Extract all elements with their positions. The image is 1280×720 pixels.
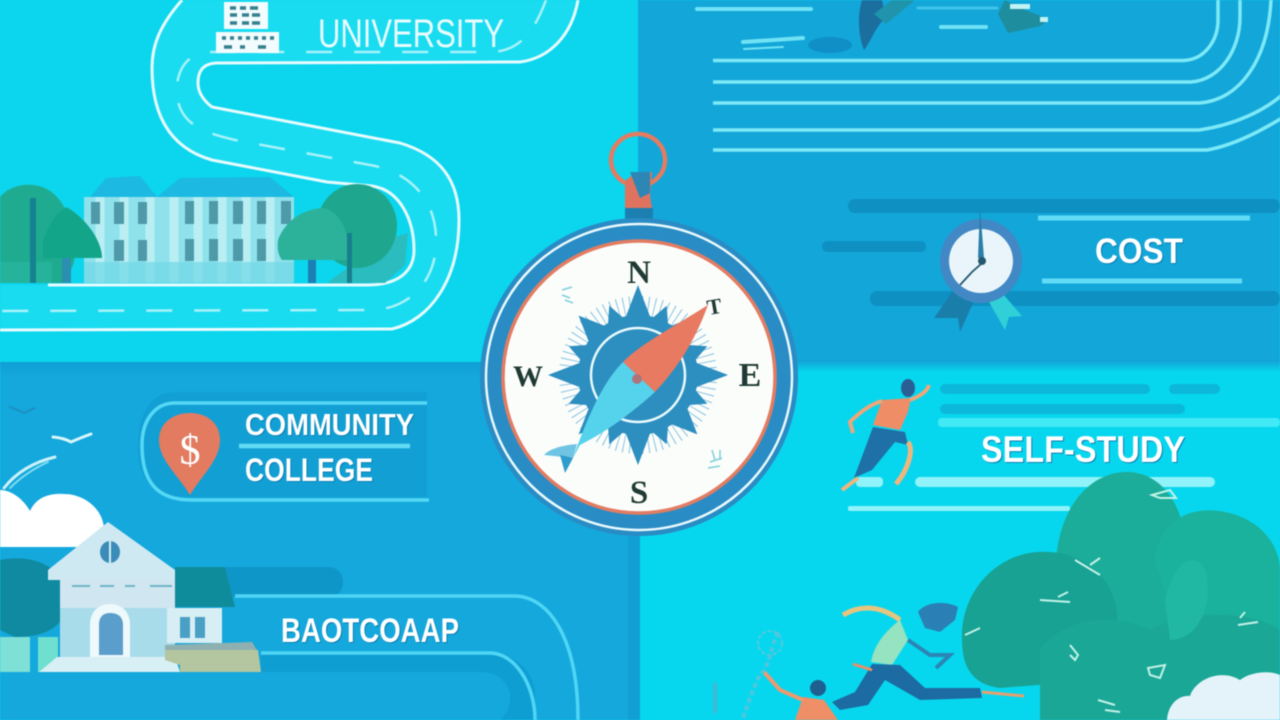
small compass marks	[562, 287, 722, 468]
icon: clock medal	[934, 207, 1022, 332]
label: community college: COMMUNITY	[245, 407, 414, 442]
bootcamp road lines	[235, 596, 578, 720]
compass star	[548, 285, 728, 465]
trees right	[278, 184, 408, 283]
cloud	[0, 490, 104, 547]
compass letters: E	[739, 357, 761, 394]
panel: running track	[638, 0, 1280, 368]
label: cost: COST	[1095, 232, 1183, 271]
trees left	[0, 185, 102, 283]
label: bootcamp: BAOTCOAAP	[281, 612, 459, 650]
label: community college: COLLEGE	[245, 452, 373, 488]
dark band behind house	[175, 567, 343, 597]
compass ring handle	[611, 134, 665, 222]
compass letters	[513, 255, 761, 511]
compass letters: T	[705, 293, 724, 320]
compass letters: N	[627, 255, 651, 291]
label: community college	[245, 407, 414, 488]
panel: community college	[0, 362, 640, 720]
icon: dollar map pin: $	[180, 428, 200, 474]
label: self-study: SELF-STUDY	[981, 429, 1185, 470]
runner bottom	[832, 603, 1024, 710]
compass letters: W	[513, 360, 543, 393]
runner top	[842, 379, 929, 490]
winding road	[0, 0, 578, 330]
cropped runner legs	[808, 0, 1048, 53]
icon: dollar map pin	[159, 413, 220, 495]
bush	[962, 472, 1280, 720]
speed lines	[697, 8, 997, 49]
college outline card	[138, 392, 429, 500]
cloud bottom right	[1167, 672, 1280, 720]
panel: university	[0, 0, 640, 364]
panel: cost bands	[822, 199, 1280, 306]
compass body	[480, 218, 798, 536]
compass needle	[544, 305, 708, 473]
icon: white campus building	[216, 2, 279, 53]
label: university: UNIVERSITY	[318, 12, 504, 56]
track lanes	[713, 0, 1280, 150]
panel: self study	[640, 360, 1280, 720]
compass	[480, 134, 798, 536]
campus building scene	[84, 176, 294, 283]
runner lower left	[713, 631, 838, 720]
birds	[4, 407, 91, 488]
bands	[848, 384, 1280, 511]
compass letters: S	[630, 475, 648, 511]
house scene	[0, 522, 261, 672]
